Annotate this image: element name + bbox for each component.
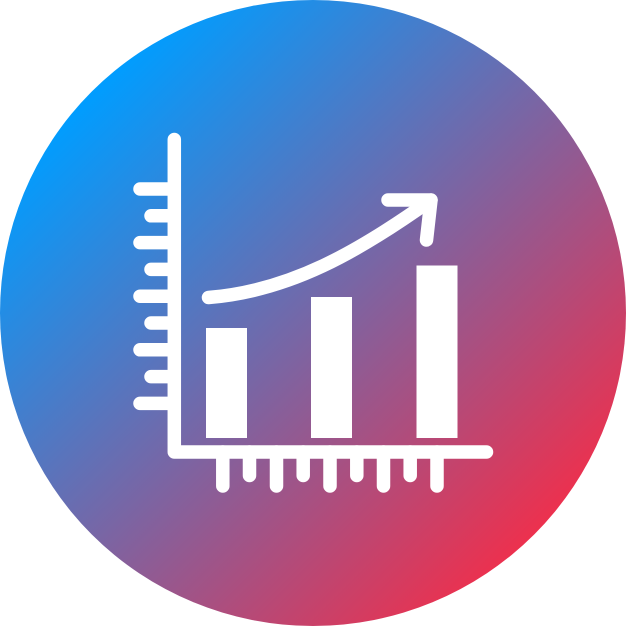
bar 3 — [416, 266, 458, 438]
bar 1 — [206, 328, 247, 438]
y-axis ticks — [140, 189, 174, 403]
arrow: growth trend — [208, 200, 431, 298]
x-axis ticks — [223, 452, 437, 486]
chart axes — [174, 140, 487, 452]
bar 2 — [311, 297, 352, 438]
